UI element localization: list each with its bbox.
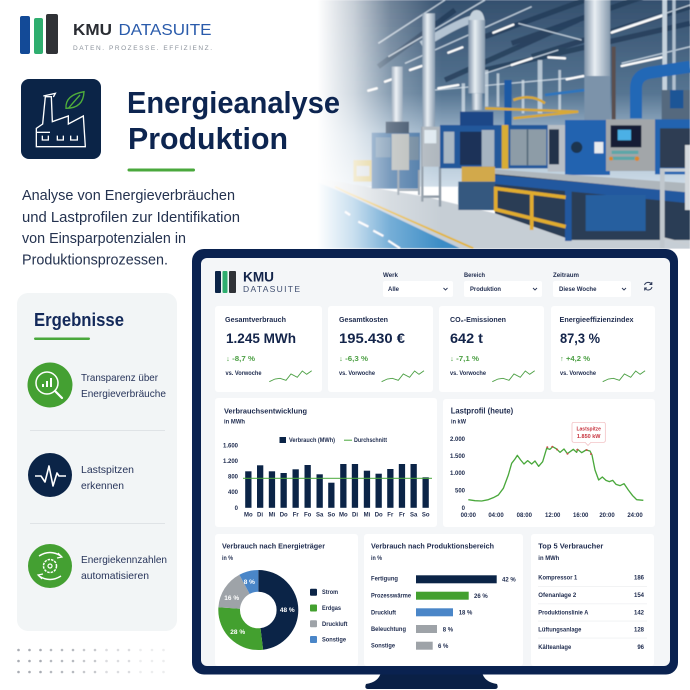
intro paragraph: Produktionsprozessen. (22, 252, 168, 268)
line chart (468, 446, 643, 501)
KPI card: Energieeffizienzindex: 87,3 % (560, 330, 600, 346)
KPI card: Gesamtverbrauch: vs. Vorwoche (226, 371, 262, 377)
intro paragraph: und Lastprofilen zur Identifikation (22, 209, 240, 226)
x axis: 04:00 (488, 513, 504, 519)
under conveyor (495, 173, 690, 240)
bar chart (245, 464, 429, 508)
x axis: 08:00 (517, 513, 533, 519)
dot pattern (17, 649, 165, 673)
x axis days (244, 513, 430, 519)
floor (340, 186, 690, 249)
logo: KMU Datasuite: DATEN. PROZESSE. EFFIZIENZ. (73, 45, 212, 52)
chart legend (280, 437, 387, 444)
row: Produktionslinie A (538, 610, 645, 616)
KPI card: Gesamtverbrauch (215, 306, 322, 392)
x axis days: Do (280, 513, 288, 519)
KPI card: CO2-Emissionen: 642 t (450, 330, 483, 346)
row: Kälteanlage: Kälteanlage (538, 645, 572, 651)
KPI card: CO2-Emissionen (439, 306, 544, 392)
x axis days: Di (257, 513, 263, 519)
x axis: 20:00 (599, 513, 615, 519)
x axis: 16:00 (573, 513, 589, 519)
x axis (461, 513, 643, 519)
filter: Werk: Alle (388, 287, 400, 293)
KPI card: Energieeffizienzindex (551, 306, 655, 392)
filter: Zeitraum: Diese Woche (559, 287, 597, 293)
icon: factory with leaf (21, 79, 101, 159)
yellow overhead rail (485, 97, 578, 118)
y axis: 1.500 (450, 454, 466, 460)
filter: Bereich (464, 273, 542, 297)
chart legend: Verbrauch (MWh) (289, 438, 335, 444)
result: Lastspitzen: Lastspitzen (81, 464, 134, 476)
y axis: 800 (228, 474, 239, 480)
callout: Lastspitze: Lastspitze (576, 426, 601, 432)
row: Kälteanlage: 96 (637, 645, 645, 651)
row: Kompressor 1: Kompressor 1 (538, 576, 578, 582)
donut legend: Strom (322, 590, 338, 596)
callout: Lastspitze (572, 422, 605, 446)
panel: Verbrauch nach Produktionsbereich: Verbrauch nach Produktionsbereich (371, 544, 494, 551)
donut labels: 8 % (244, 579, 255, 586)
filter: Werk (383, 273, 453, 297)
result: Lastspitzen (81, 464, 134, 492)
KPI card: Gesamtverbrauch: 1.245 MWh (226, 330, 296, 346)
result: Energiekennzahlen (81, 554, 167, 582)
KPI card: Gesamtkosten (328, 306, 433, 392)
y axis (223, 443, 239, 512)
x axis: 12:00 (545, 513, 561, 519)
y axis: 1.000 (450, 471, 466, 477)
average line (243, 478, 432, 479)
icon: gear with cycle arrows (28, 544, 72, 588)
row: Prozesswärme (371, 592, 488, 600)
logo: KMU Datasuite: DATASUITE (118, 22, 212, 39)
x axis days: Sa (316, 513, 324, 519)
KPI card: CO2-Emissionen: CO₂-Emissionen (450, 317, 506, 324)
row: Sonstige: Sonstige (371, 644, 396, 650)
row: Fertigung (371, 575, 516, 584)
row: Druckluft: Druckluft (371, 610, 396, 616)
row: Beleuchtung (371, 625, 454, 633)
blue pipe (636, 67, 690, 118)
panel: Verbrauch nach Energieträger: in % (222, 556, 234, 562)
chart panel: Verbrauchsentwicklung (215, 398, 437, 527)
photo fade (255, 0, 515, 252)
dashboard logo (215, 270, 300, 294)
filter: Bereich: Bereich (464, 273, 485, 279)
center machine (440, 125, 505, 168)
chart panel: Lastprofil: in kW (451, 420, 466, 426)
x axis days: Mi (364, 513, 371, 519)
panel: Top 5 Verbraucher: Top 5 Verbraucher (538, 544, 604, 551)
x axis days: Mo (244, 513, 253, 519)
y axis: 0 (235, 506, 239, 512)
monitor stand (365, 672, 498, 689)
big blue cabinet (565, 120, 610, 175)
logo: KMU Datasuite (20, 14, 212, 54)
result: Energiekennzahlen: Energiekennzahlen (81, 554, 167, 566)
panel: Top 5 Verbraucher (531, 534, 654, 666)
y axis: 1.200 (223, 459, 239, 465)
x axis days: Fr (293, 513, 299, 519)
panel: Verbrauch nach Produktionsbereich (364, 534, 523, 666)
row: Ofenanlage 2 (538, 593, 645, 599)
row: Fertigung: Fertigung (371, 577, 398, 583)
title: Produktion (128, 122, 288, 156)
x axis days: So (327, 513, 335, 519)
icon: magnifier with bars (28, 362, 72, 408)
panel: Verbrauch nach Energieträger (215, 534, 358, 666)
result: Transparenz: Transparenz über (81, 372, 158, 384)
result: Transparenz (81, 372, 166, 400)
filter: Zeitraum: Zeitraum (553, 273, 579, 279)
dashboard logo: DATASUITE (243, 284, 300, 294)
panel: Top 5 Verbraucher: in MWh (538, 556, 560, 562)
callout: Lastspitze: 1.850 kW (577, 434, 601, 440)
KPI card: Gesamtkosten: ↓ -6,3 % (339, 356, 369, 363)
filter: Bereich: Produktion (470, 287, 501, 293)
y axis: 1.600 (223, 443, 239, 449)
result: Energiekennzahlen: automatisieren (81, 570, 149, 582)
dashboard logo: KMU (243, 270, 274, 284)
KPI card: Gesamtverbrauch: Gesamtverbrauch (225, 317, 286, 324)
y axis: 2.000 (450, 437, 466, 443)
filter: Werk: Werk (383, 273, 399, 279)
heading underline (34, 338, 90, 340)
row: Prozesswärme: Prozesswärme (371, 594, 412, 600)
donut labels: 16 % (224, 595, 239, 602)
x axis days: Fr (399, 513, 406, 519)
intro paragraph (22, 187, 240, 268)
result: Transparenz: Energieverbräuche (81, 388, 166, 400)
heading: Ergebnisse: Ergebnisse (34, 310, 124, 330)
row: Beleuchtung: 8 % (443, 627, 454, 633)
KPI card: Gesamtverbrauch: ↓ -8,7 % (226, 356, 256, 363)
title: Energieanalyse (127, 86, 340, 120)
KPI card: Energieeffizienzindex: Energieeffizienzindex (560, 317, 634, 324)
x axis days: Mo (339, 513, 348, 519)
result: Lastspitzen: erkennen (81, 480, 124, 492)
row: Kälteanlage (538, 645, 645, 651)
KPI card: Gesamtkosten: vs. Vorwoche (339, 371, 376, 377)
KPI card: Energieeffizienzindex: vs. Vorwoche (560, 371, 597, 377)
donut labels: 48 % (280, 607, 295, 614)
row: Druckluft (371, 608, 473, 616)
chart legend: Durchschnitt (354, 438, 387, 444)
row: Sonstige: 6 % (438, 644, 449, 650)
y axis: 500 (455, 488, 466, 494)
control panel (606, 119, 655, 171)
row: Sonstige (371, 642, 449, 650)
KPI card: Energieeffizienzindex: ↑ +4,2 % (560, 356, 591, 363)
donut chart (229, 581, 287, 639)
donut legend: Erdgas (322, 606, 342, 612)
row: Fertigung: 42 % (502, 578, 516, 584)
x axis days: Fr (387, 513, 394, 519)
KPI card: Gesamtkosten: Gesamtkosten (339, 317, 388, 324)
x axis: 24:00 (627, 513, 643, 519)
intro paragraph: von Einsparpotenzialen in (22, 230, 186, 247)
panel: Verbrauch nach Produktionsbereich: in % (371, 556, 383, 562)
KPI card: CO2-Emissionen: ↓ -7,1 % (450, 356, 480, 363)
title (127, 86, 340, 156)
row: Kompressor 1 (538, 576, 645, 582)
yellow frame (495, 187, 566, 230)
logo: KMU Datasuite: KMU (73, 22, 112, 39)
KPI card: Gesamtkosten: 195.430 € (339, 330, 405, 346)
x axis: 00:00 (461, 513, 477, 519)
row: Lüftungsanlage (538, 628, 645, 634)
panel: Ergebnisse (17, 293, 177, 631)
x axis days: Sa (410, 513, 418, 519)
y axis: 400 (228, 490, 239, 496)
photo: factory production line (322, 0, 690, 249)
y axis: 0 (462, 506, 466, 512)
icon: refresh (644, 282, 652, 290)
filter: Zeitraum (553, 273, 631, 297)
donut legend: Sonstige (322, 638, 347, 644)
chart panel: Verbrauchsentwicklung: Verbrauchsentwicklung (224, 408, 307, 415)
donut labels (224, 579, 295, 636)
x axis days: So (422, 513, 430, 519)
row: Kompressor 1: 186 (634, 576, 645, 582)
chart panel: Lastprofil: Lastprofil (heute) (451, 407, 514, 416)
intro paragraph: Analyse von Energieverbräuchen (22, 187, 235, 204)
row: Ofenanlage 2: Ofenanlage 2 (538, 593, 577, 599)
chart panel: Verbrauchsentwicklung: in MWh (224, 420, 245, 426)
donut legend (310, 589, 348, 644)
row: Ofenanlage 2: 154 (634, 593, 645, 599)
panel: Verbrauch nach Energieträger: Verbrauch nach Energieträger (222, 544, 325, 551)
icon: pulse (28, 453, 72, 497)
title underline (128, 168, 195, 172)
donut legend: Druckluft (322, 622, 348, 628)
x axis days: Do (375, 513, 383, 519)
KPI card: CO2-Emissionen: vs. Vorwoche (450, 371, 487, 377)
row: Druckluft: 18 % (459, 610, 473, 616)
monitor: dashboard (192, 249, 678, 674)
x axis days: Mi (269, 513, 276, 519)
row: Lüftungsanlage: 128 (634, 628, 645, 634)
row: Beleuchtung: Beleuchtung (371, 627, 406, 633)
silver duct (422, 19, 473, 45)
row: Produktionslinie A: Produktionslinie A (538, 610, 589, 616)
row: Lüftungsanlage: Lüftungsanlage (538, 628, 582, 634)
chart panel: Lastprofil (443, 399, 655, 527)
x axis days: Di (352, 513, 358, 519)
row: Produktionslinie A: 142 (634, 610, 645, 616)
donut labels: 28 % (230, 629, 245, 636)
left machines (353, 160, 372, 182)
y axis (450, 437, 466, 512)
row: Prozesswärme: 26 % (474, 594, 488, 600)
x axis days: Fo (304, 513, 312, 519)
